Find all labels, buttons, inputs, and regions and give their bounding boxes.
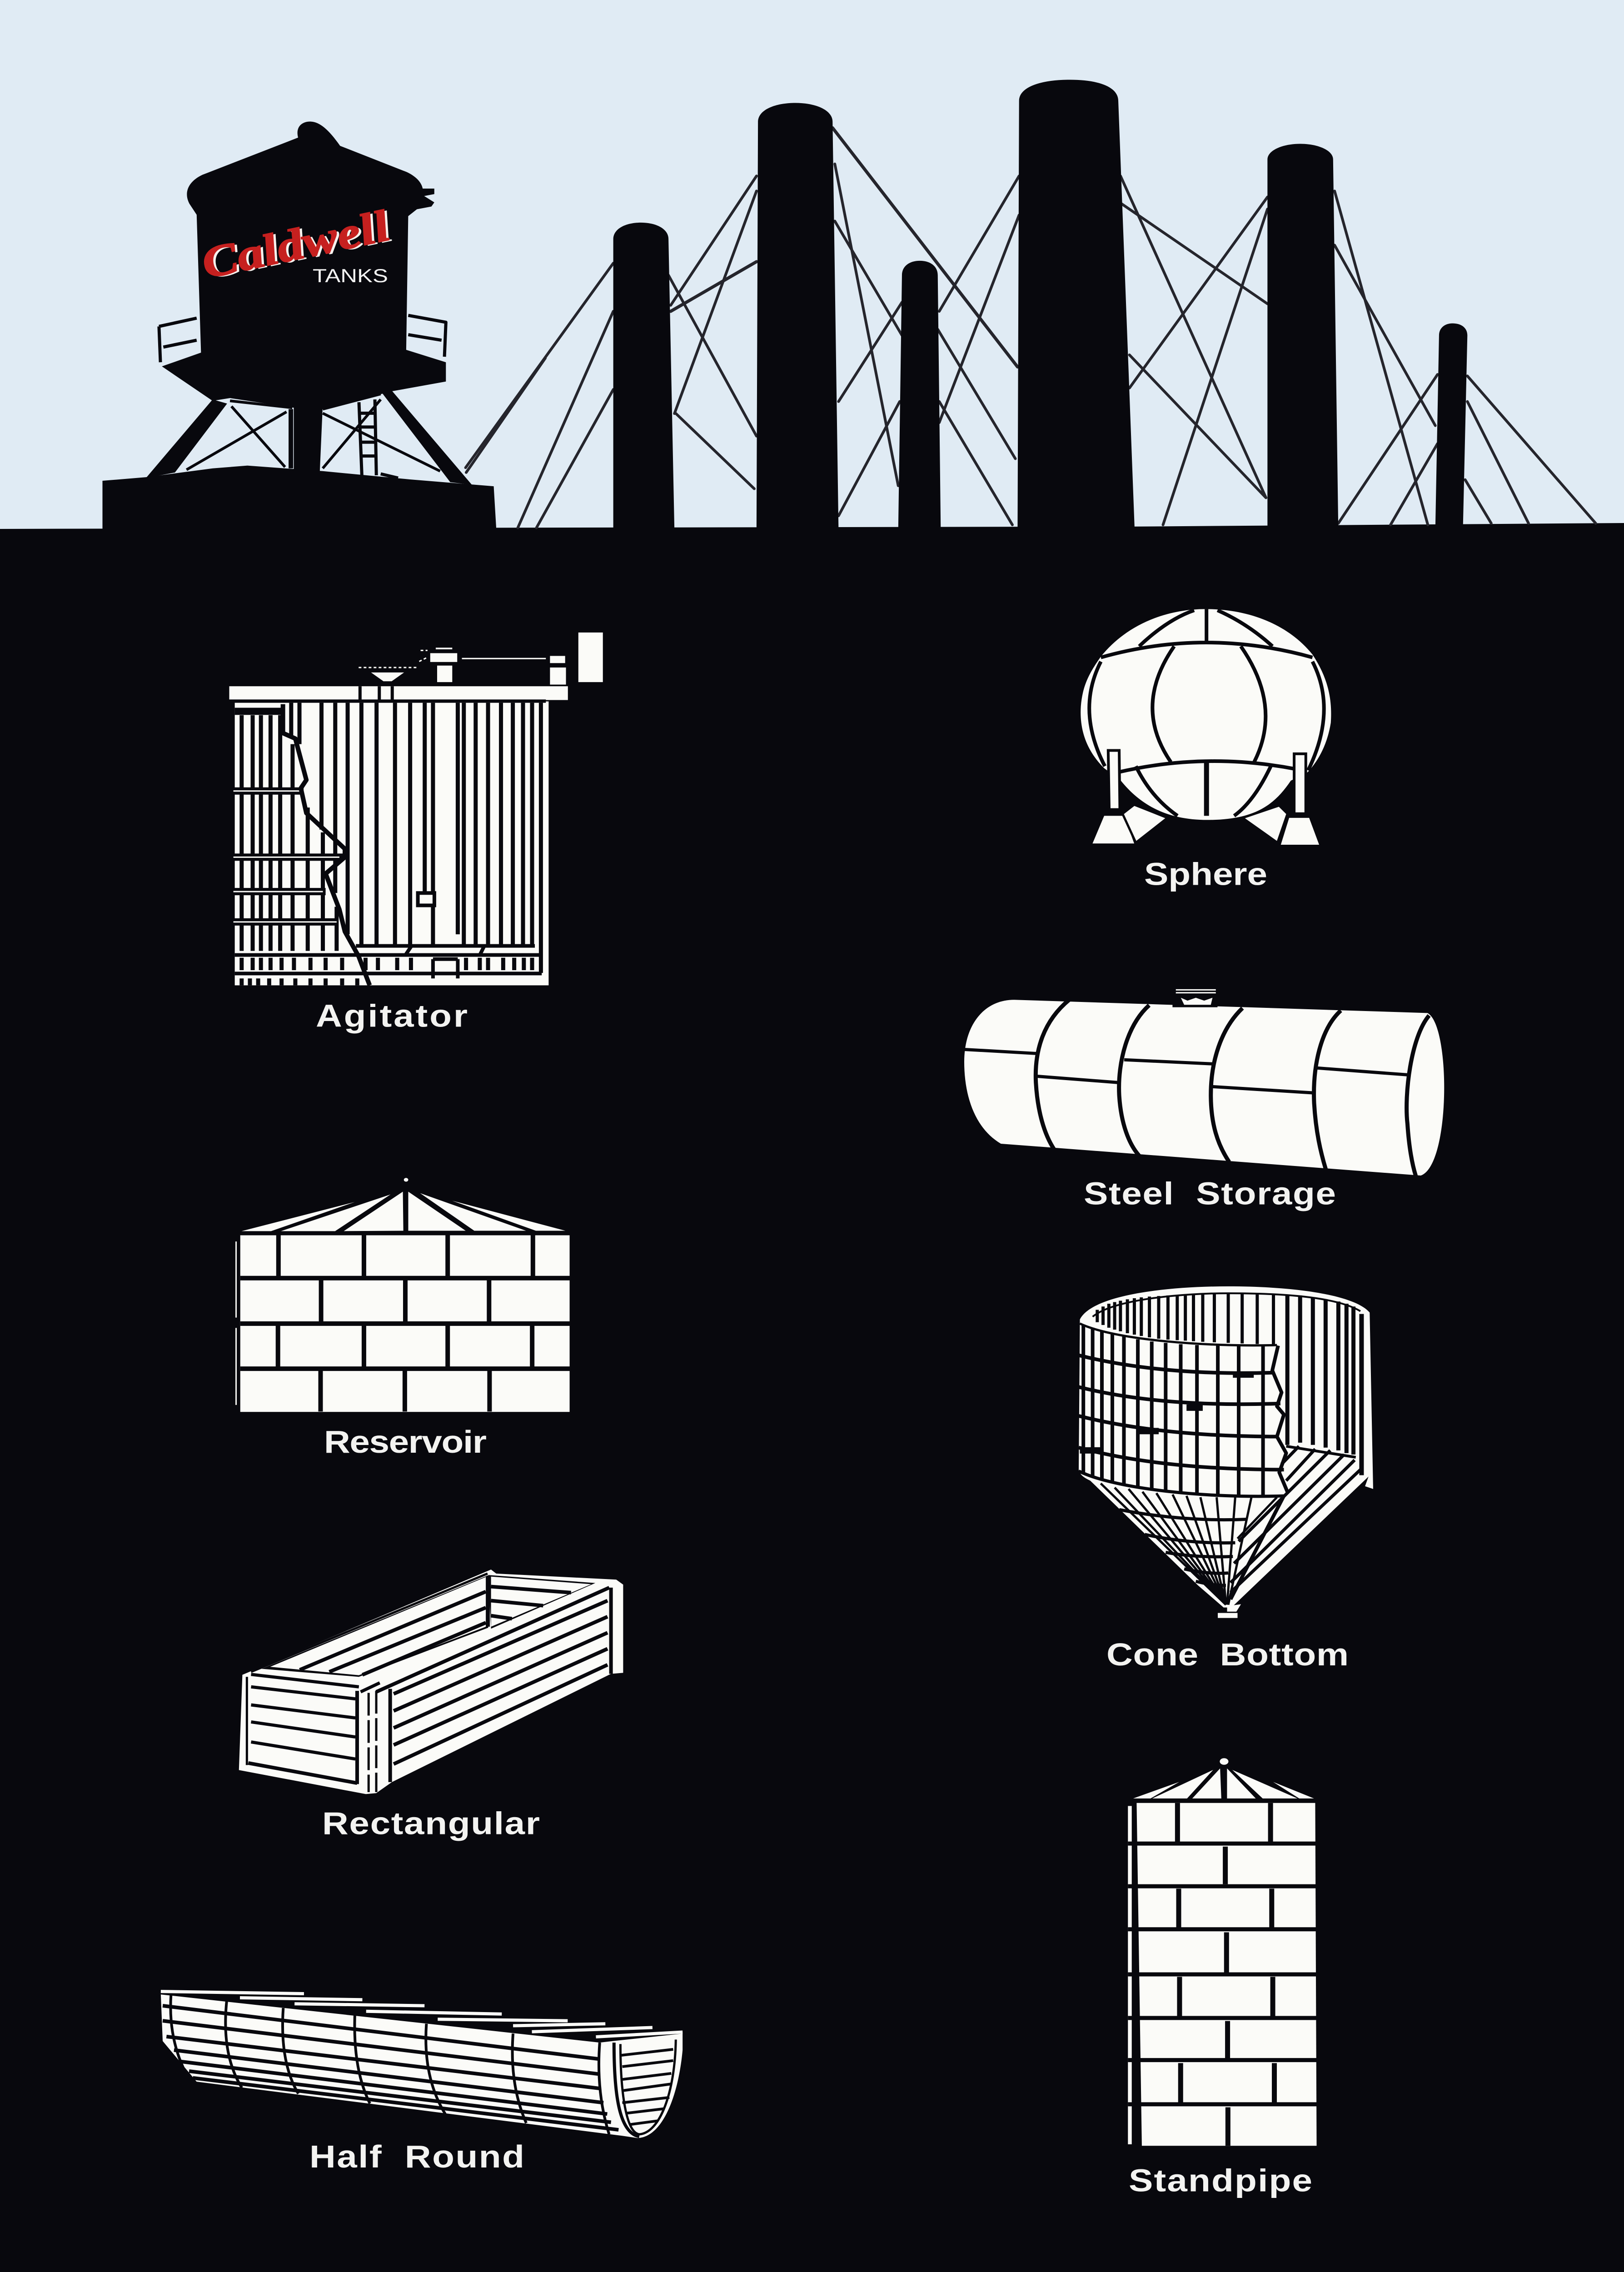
panel: Cone Bottom	[1079, 1286, 1373, 1672]
label: Reservoir: Reservoir	[324, 1424, 487, 1460]
sky background	[0, 0, 1624, 550]
stack 4	[1017, 80, 1135, 531]
label: Sphere: Sphere	[1144, 857, 1267, 892]
sign: TANKS: TANKS	[313, 265, 388, 286]
label: Cone Bottom: Cone Bottom	[1106, 1637, 1349, 1672]
panel: Agitator	[229, 633, 603, 1033]
sign: Caldwell script: Caldwell	[199, 202, 398, 289]
icon: rectangular tank	[239, 1569, 623, 1794]
icon: horizontal steel storage tank	[964, 987, 1444, 1176]
panel: Rectangular	[239, 1569, 623, 1841]
label: Agitator: Agitator	[316, 998, 468, 1033]
stack 6	[1435, 324, 1467, 531]
panel: Reservoir	[236, 1178, 570, 1460]
stack 2	[757, 103, 838, 531]
icon: sphere tank	[1081, 609, 1331, 845]
label: Standpipe: Standpipe	[1129, 2163, 1312, 2198]
label: Half Round: Half Round	[309, 2139, 524, 2174]
stack 3	[898, 261, 941, 531]
panel: Steel Storage	[964, 987, 1444, 1211]
smokestacks with guy wires	[466, 80, 1596, 531]
icon: agitator tank	[229, 633, 603, 985]
icon: standpipe tank	[1128, 1758, 1317, 2146]
label: Rectangular: Rectangular	[322, 1806, 540, 1841]
panel: Standpipe	[1128, 1758, 1317, 2198]
panel: Sphere	[1081, 609, 1331, 892]
icon: reservoir tank	[236, 1178, 570, 1412]
label: Steel Storage: Steel Storage	[1084, 1176, 1336, 1211]
water tower with Caldwell sign	[103, 122, 545, 534]
icon: half round tank	[161, 1992, 682, 2138]
ground: black lower field	[0, 523, 1624, 2272]
panel: Half Round	[161, 1992, 682, 2174]
icon: cone bottom tank	[1079, 1286, 1373, 1618]
sign: Caldwell script: Caldwell	[196, 201, 395, 288]
tower silhouette	[103, 122, 545, 534]
guy wires	[466, 128, 1596, 528]
stack 1	[613, 223, 674, 531]
stack 5	[1267, 144, 1338, 531]
